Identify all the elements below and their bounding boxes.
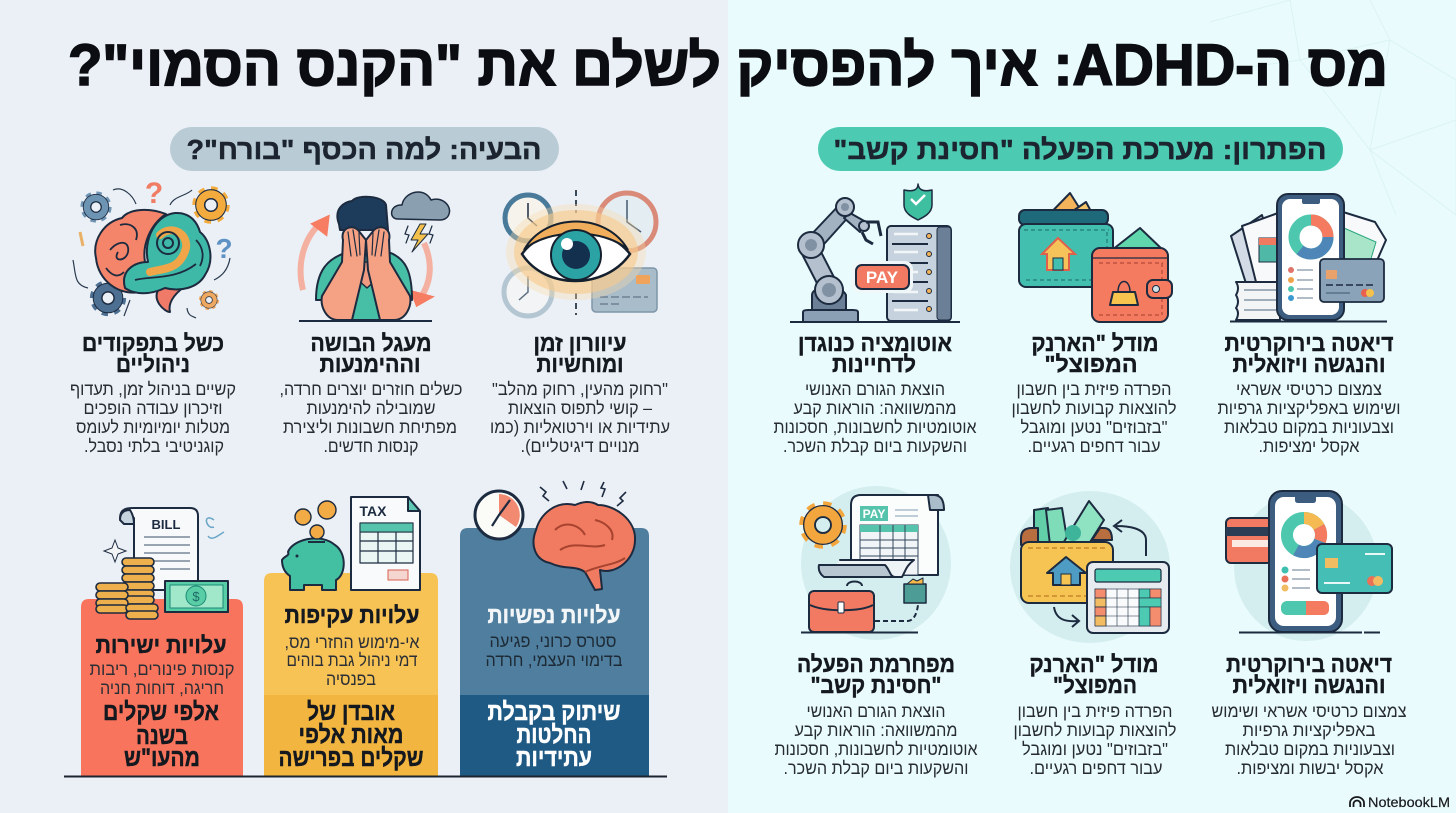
description: והשקעות ביום קבלת השכר. [783, 436, 967, 456]
bar amount: מאות אלפי [298, 721, 404, 749]
panel: activation firewall [774, 486, 978, 778]
icon: piggy bank, coins and tax form: TAX [360, 503, 387, 519]
icon: bill, coins and cash: $ [192, 589, 200, 604]
icon: colourful brain with gears [73, 177, 233, 318]
description: וצבעוניות במקום טבלאות [1225, 739, 1395, 759]
heading: והנגשה ויזואלית [1232, 672, 1386, 698]
bar amount: בשנה [136, 722, 188, 750]
bar description: דמי ניהול גבת בוהים [286, 650, 418, 670]
heading: המפוצל" [1053, 672, 1137, 698]
panel: cycle of shame [280, 192, 462, 456]
description: הוצאת הגורם האנושי [805, 379, 945, 399]
description: עתידיות או וירטואליות (כמו [490, 417, 670, 437]
icon: robot arm, server and pay button [790, 184, 960, 322]
description: וצבעוניות במקום טבלאות [1224, 417, 1394, 437]
icon: man covering his face [299, 192, 450, 321]
heading [1226, 651, 1392, 698]
bar description: בפנסיה [326, 669, 376, 689]
description [1212, 701, 1406, 778]
description: קוגניטיבי בלתי נסבל. [84, 436, 224, 456]
description [1014, 701, 1176, 778]
bar amount [278, 698, 424, 772]
bar amount: החלטות [516, 721, 592, 749]
description [774, 379, 977, 456]
heading pill: the solution [818, 127, 1343, 171]
heading: וההימנעות [320, 351, 420, 377]
description: להוצאות קבועות לחשבון [1012, 398, 1176, 418]
bar amount [103, 698, 219, 772]
bar chart: costs [64, 481, 667, 776]
description: קשיים בניהול זמן, תעדוף [70, 379, 236, 399]
icon: phone with cards [1226, 491, 1392, 641]
icon: eye with clocks and card [504, 190, 657, 316]
icon: piggy bank, coins and tax form [282, 497, 420, 590]
description [1012, 379, 1176, 456]
panel: executive dysfunction [70, 177, 236, 456]
heading [1030, 651, 1158, 698]
bar description: בדימוי העצמי, חרדה [486, 650, 622, 670]
bar description: סטרס כרוני, פגיעה [490, 631, 616, 651]
description: – קושי לתפוס הוצאות [508, 398, 652, 418]
bar description [90, 659, 234, 698]
bar description: קנסות פינורים, ריבות [90, 659, 234, 679]
bar amount: אלפי שקלים [103, 698, 219, 726]
heading: דיאטה בירוקרטית [1226, 651, 1392, 677]
description: אוטומטיות לחשבונות, חסכונות [774, 417, 977, 437]
description: שמובילה להימנעות [306, 398, 436, 418]
bar amount: מהעו"ש [124, 744, 200, 772]
description [774, 701, 978, 778]
heading [1224, 330, 1394, 377]
bar amount: שיתוק בקבלת [488, 698, 620, 726]
heading: כשל בתפקודים [82, 330, 224, 356]
bar heading: עלויות ישירות [96, 632, 226, 658]
description: באפליקציות גרפיות [1242, 720, 1376, 740]
description: אקסל ימציפות. [1258, 436, 1360, 456]
bar description [284, 632, 420, 689]
bar amount: אובדן של [307, 698, 395, 726]
heading: המפוצל" [1044, 351, 1138, 377]
icon: bill, coins and cash [96, 508, 228, 619]
left background panel [0, 0, 728, 813]
heading: מודל "הארנק [1032, 330, 1158, 356]
panel: time blindness [490, 190, 670, 456]
heading: מעגל הבושה [310, 330, 432, 356]
icon: two wallets [1019, 193, 1172, 322]
description: מהמשוואה: הוראות קבע [794, 720, 958, 740]
heading: "חסינת קשב" [810, 672, 942, 698]
bar description: אי-מימוש החזרי מס, [284, 632, 420, 652]
description: עבור דחפים רגעיים. [1028, 436, 1160, 456]
bar amount: שקלים בפרישה [278, 744, 424, 772]
heading [534, 330, 626, 377]
icon: bill, coins and cash: BILL [152, 517, 180, 532]
bar heading: עלויות עקיפות [284, 602, 420, 628]
right background panel [728, 0, 1456, 813]
bar heading: עלויות נפשיות [488, 602, 620, 628]
heading pill: the solution: הפתרון: מערכת הפעלה "חסינת קשב" [834, 134, 1326, 165]
heading: דיאטה בירוקרטית [1224, 330, 1394, 356]
icon: payslip scroll, gear and briefcase: PAY [863, 507, 885, 521]
description: צמצום כרטיסי אשראי [1236, 379, 1382, 399]
panel: split wallet top [1012, 193, 1176, 456]
heading pill: the problem: הבעיה: למה הכסף "בורח"? [186, 134, 542, 165]
description [490, 379, 670, 456]
description: להוצאות קבועות לחשבון [1014, 720, 1176, 740]
bar amount: עתידיות [516, 744, 592, 772]
description [1218, 379, 1400, 456]
description: מהמשוואה: הוראות קבע [794, 398, 956, 418]
heading: מפחרמת הפעלה [797, 651, 955, 677]
icon: colourful brain with gears: ? [145, 177, 163, 210]
description: "רחוק מהעין, רחוק מהלב" [492, 379, 668, 399]
description: "בזבוזים" נטען ומוגבל [1020, 417, 1168, 437]
heading: מודל "הארנק [1030, 651, 1158, 677]
heading: והנגשה ויזואלית [1232, 351, 1386, 377]
panel: automation top [774, 184, 977, 456]
icon: stressed brain and clock [475, 481, 635, 590]
icon: colourful brain with gears: ? [215, 233, 233, 264]
description: הפרדה פיזית בין חשבון [1018, 701, 1172, 721]
description: והשקעות ביום קבלת השכר. [784, 758, 968, 778]
bar: direct costs [81, 508, 243, 776]
bar: indirect costs [264, 497, 438, 776]
description: מטלות יומיומיות לעומס [76, 417, 230, 437]
icon: phone with chart and documents [1230, 194, 1387, 322]
description: עבור דחפים רגעיים. [1030, 758, 1162, 778]
description [70, 379, 236, 456]
description: מפתיחת חשבונות וליצירת [283, 417, 457, 437]
description: "בזבוזים" נטען ומוגבל [1022, 739, 1168, 759]
heading [797, 651, 955, 698]
heading: אוטומציה כנוגדן [798, 330, 952, 356]
chart baseline [64, 776, 667, 778]
bar description: חריגה, דוחות חניה [100, 678, 224, 698]
heading [1032, 330, 1158, 377]
decorative network lines [1210, 0, 1456, 215]
description: הוצאת הגורם האנושי [806, 701, 946, 721]
panel: bureaucracy diet bottom [1212, 491, 1406, 778]
heading [82, 330, 224, 377]
logo: NotebookLM: NotebookLM [1368, 794, 1450, 810]
bar: mental costs [460, 481, 649, 776]
description: מנויים דיגיטליים). [520, 436, 640, 456]
icon: robot arm, server and pay button: PAY [866, 268, 899, 287]
bar amount [488, 698, 620, 772]
description: הפרדה פיזית בין חשבון [1016, 379, 1172, 399]
heading: ומוחשיות [536, 351, 624, 377]
description: קנסות חדשים. [324, 436, 418, 456]
description [280, 379, 462, 456]
heading: ניהוליים [116, 351, 190, 377]
heading pill: the problem [170, 127, 559, 171]
heading: לדחיינות [832, 351, 916, 377]
description: ושימוש באפליקציות גרפיות [1218, 398, 1400, 418]
icon: payslip scroll, gear and briefcase [801, 486, 951, 640]
description: צמצום כרטיסי אשראי ושימוש [1212, 701, 1406, 721]
heading [310, 330, 432, 377]
description: וזיכרון עבודה הופכים [84, 398, 222, 418]
panel: split wallet bottom [1010, 491, 1176, 778]
bar description [486, 631, 622, 670]
icon: wallet with cash and calculator [1010, 491, 1170, 643]
description: אקסל יבשות ומציפות. [1236, 758, 1384, 778]
heading: עיוורון זמן [534, 330, 626, 356]
panel: bureaucracy diet top [1218, 194, 1400, 456]
title: מס ה-ADHD: איך להפסיק לשלם את "הקנס הסמוי"? [68, 33, 1388, 98]
description: אוטומטיות לחשבונות, חסכונות [774, 739, 978, 759]
description: כשלים חוזרים יוצרים חרדה, [280, 379, 462, 399]
heading [798, 330, 952, 377]
